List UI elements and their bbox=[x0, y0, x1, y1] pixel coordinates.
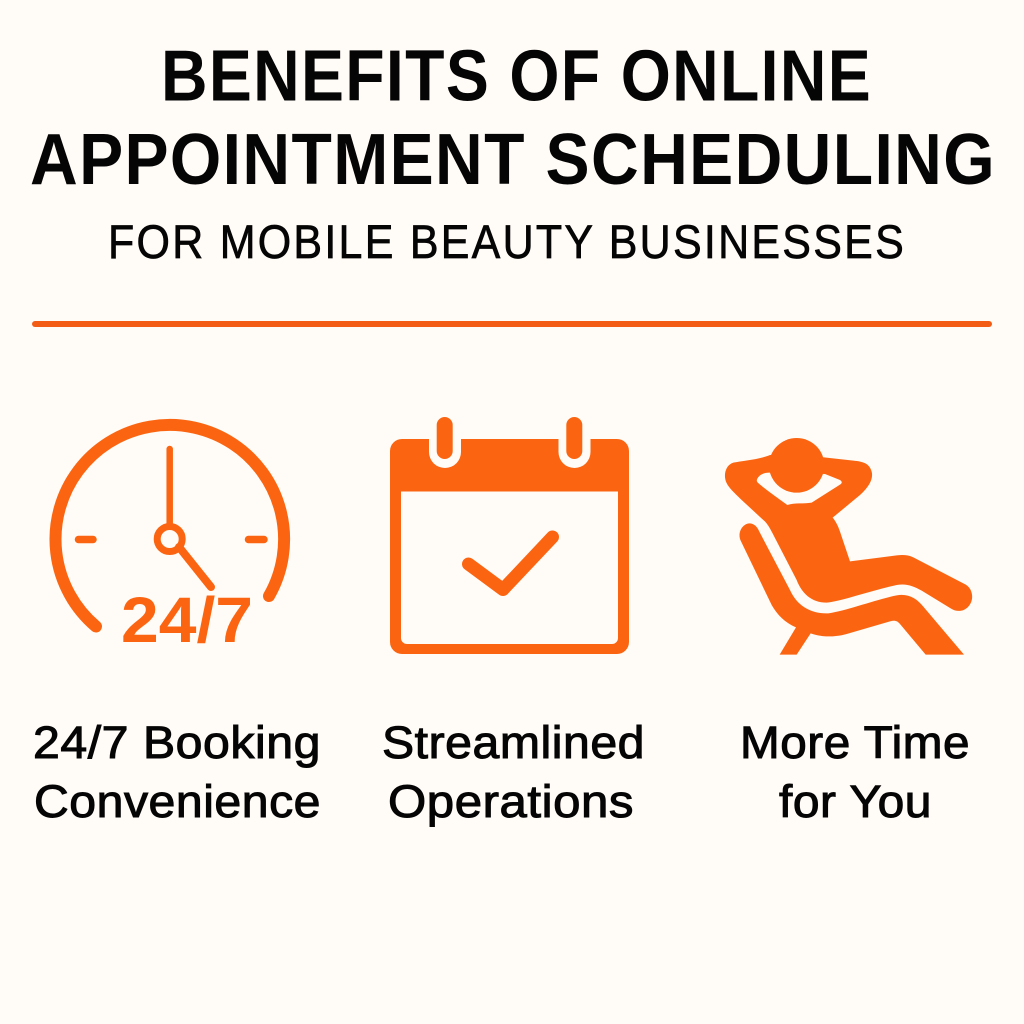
icon: 24/7 clock bbox=[56, 425, 284, 656]
clock centre hub bbox=[157, 526, 182, 552]
person arms and body bbox=[725, 455, 972, 611]
clock dial arc bbox=[56, 425, 284, 626]
icon: person relaxing in lounge chair bbox=[725, 438, 972, 655]
person head bbox=[769, 438, 824, 493]
label: 24/7 booking convenience: Convenience bbox=[34, 776, 321, 827]
calendar body bbox=[390, 439, 629, 654]
gap between arms and head bbox=[757, 473, 842, 505]
label: streamlined operations: Operations bbox=[388, 776, 634, 827]
title: BENEFITS OF ONLINE bbox=[161, 36, 872, 116]
clock hour ticks bbox=[78, 536, 264, 543]
label: more time for you: for You bbox=[779, 776, 932, 827]
lounge chair bbox=[740, 523, 964, 655]
clock 24/7 label: 24/7 bbox=[121, 584, 253, 656]
calendar binding rings bbox=[445, 425, 574, 451]
label: 24/7 booking convenience: 24/7 Booking bbox=[33, 717, 321, 768]
icon: calendar with check mark bbox=[390, 425, 629, 654]
clock hour hand bbox=[179, 547, 211, 587]
label: 24/7 booking convenience bbox=[33, 717, 321, 827]
title bbox=[30, 36, 996, 200]
clock hands bbox=[166, 449, 173, 526]
label: streamlined operations bbox=[382, 717, 645, 827]
subtitle: FOR MOBILE BEAUTY BUSINESSES bbox=[108, 216, 906, 269]
label: more time for you: More Time bbox=[740, 717, 970, 768]
calendar check mark bbox=[468, 537, 552, 590]
label: more time for you bbox=[740, 717, 970, 827]
label: streamlined operations: Streamlined bbox=[382, 717, 645, 768]
